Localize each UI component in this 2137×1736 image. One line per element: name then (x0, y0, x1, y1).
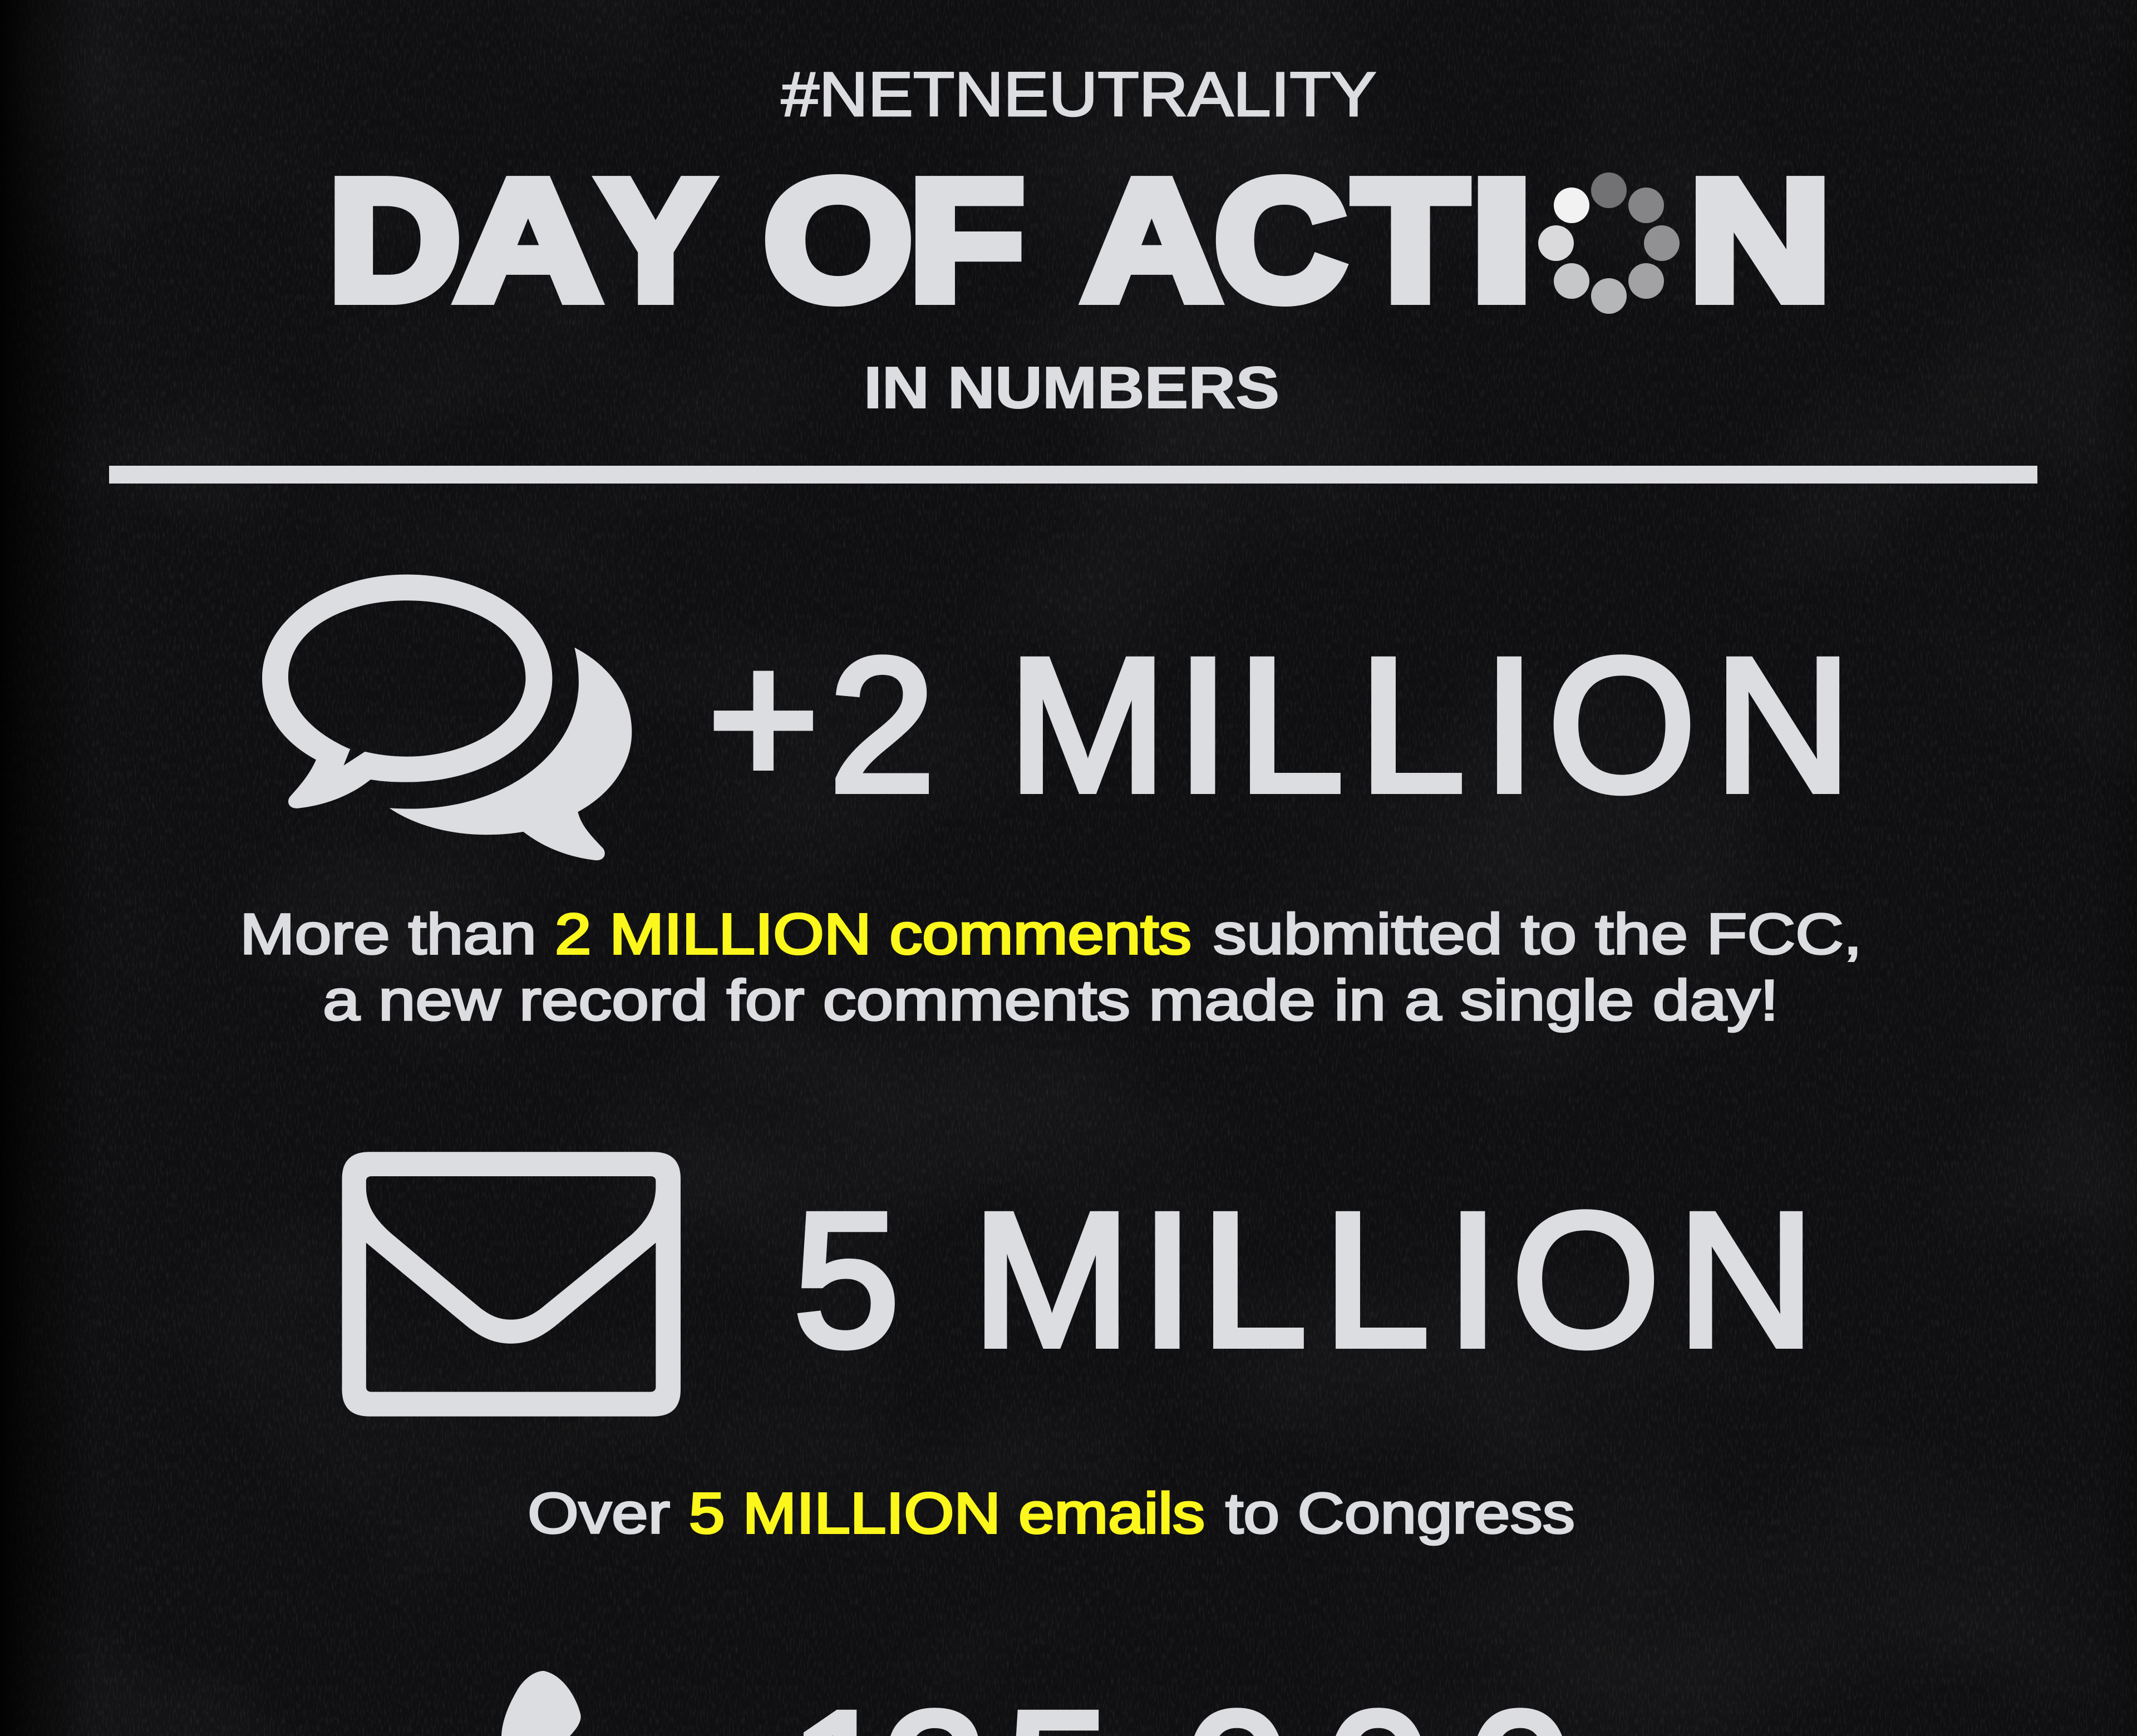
text: emails description: 5 MILLION emails (689, 1481, 1205, 1545)
title: DAY OF ACTION: N (1689, 145, 1831, 336)
title: DAY OF ACTION: D (328, 145, 461, 336)
text: emails description: to Congress (1225, 1481, 1575, 1545)
title: DAY OF ACTION: O (764, 145, 913, 336)
title: DAY OF ACTION: A (1082, 145, 1221, 336)
text: emails description (528, 1481, 1575, 1545)
title: DAY OF ACTION: C (1214, 145, 1346, 336)
text: comments description: a new record for comments made in a single day! (323, 968, 1779, 1032)
icon: loading spinner as the letter O (1538, 172, 1680, 314)
text: comments description (240, 902, 1862, 1032)
stat: +2 MILLION: + (708, 612, 819, 825)
icon: speech bubbles (262, 575, 632, 860)
subtitle: in numbers: IN NUMBERS (864, 355, 1279, 421)
title: DAY OF ACTION: F (909, 145, 1025, 336)
title: DAY OF ACTION: I (1470, 145, 1533, 336)
panel: comments (240, 575, 1862, 1032)
icon: phone handset (501, 1671, 581, 1736)
title: DAY OF ACTION: T (1353, 145, 1468, 336)
icon: envelope (342, 1152, 681, 1417)
title: DAY OF ACTION (328, 145, 1831, 336)
text: comments description: More than (240, 902, 536, 966)
text: comments description: submitted to the FCC, (1213, 902, 1862, 966)
stat: 5 MILLION: 5MILLION (794, 1173, 1815, 1386)
header: hashtag line: #NETNEUTRALITY (781, 60, 1376, 129)
title: DAY OF ACTION: Y (599, 145, 713, 336)
stat: +2 MILLION: 2MILLION (829, 619, 1852, 831)
panel: emails (342, 1152, 1815, 1545)
text: emails description: Over (528, 1481, 670, 1545)
title: DAY OF ACTION: A (455, 145, 601, 336)
text: comments description: 2 MILLION comments (555, 902, 1191, 966)
divider bar (109, 466, 2037, 484)
panel: phone calls (cropped at bottom) (501, 1671, 1573, 1736)
